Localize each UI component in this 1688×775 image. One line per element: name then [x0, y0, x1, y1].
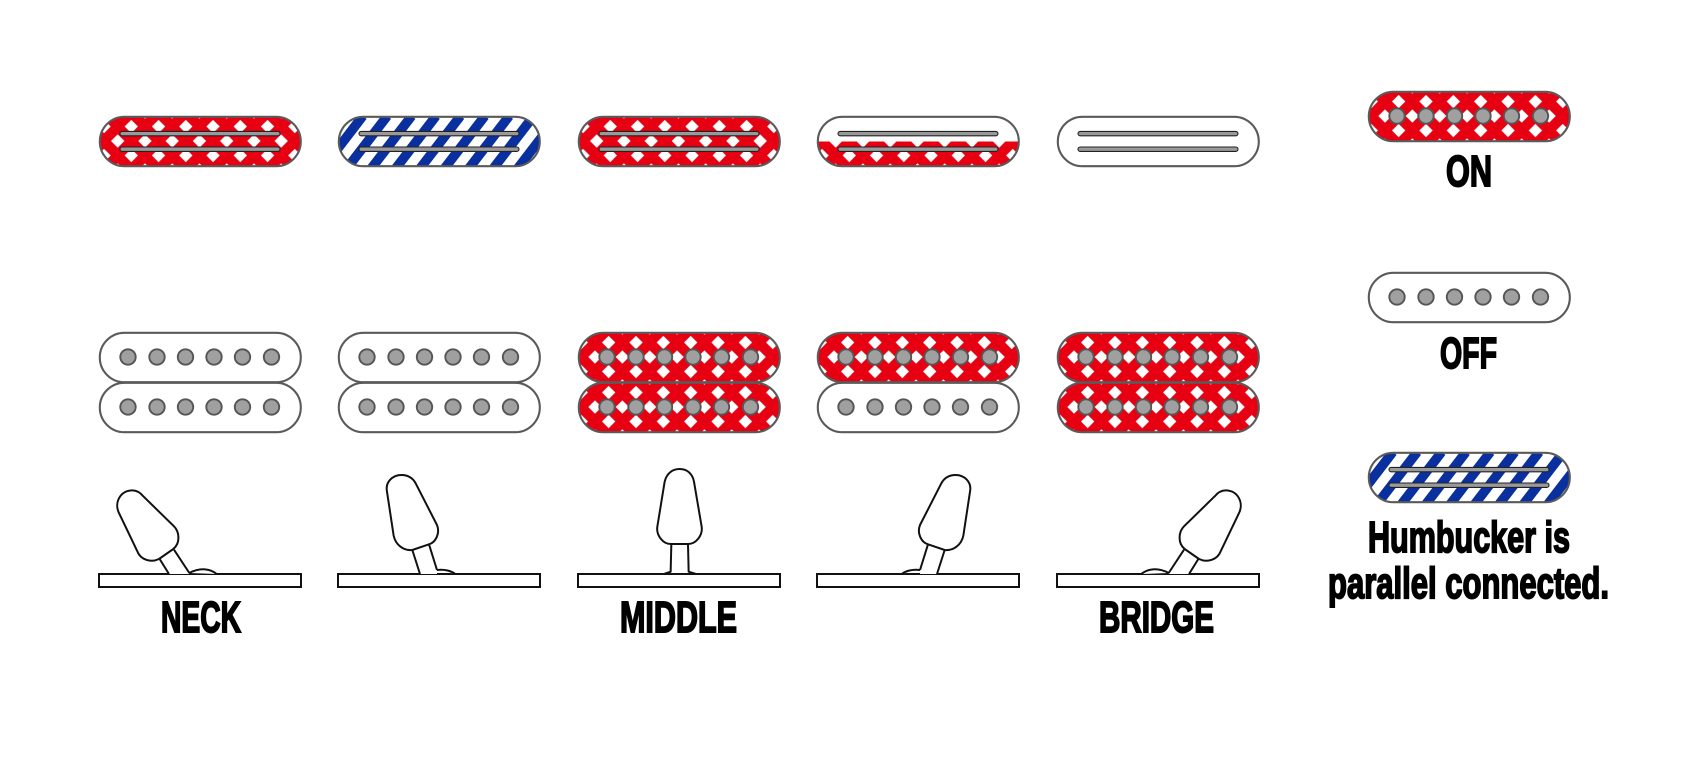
legend label: OFF: OFF — [1440, 329, 1497, 378]
label: MIDDLE: MIDDLE — [620, 593, 737, 642]
legend note: humbucker is parallel connected: Humbucker is — [1368, 513, 1570, 562]
pickup pair: neck position, both off — [100, 333, 301, 432]
humbucker row: neck position, on — [100, 117, 301, 166]
pickup pair: bridge position, both on — [1058, 333, 1259, 432]
toggle switch: bridge — [1057, 490, 1259, 587]
toggle switch: position 4 — [817, 475, 1019, 587]
humbucker row: middle position, on — [579, 117, 780, 166]
legend note: humbucker is parallel connected — [1328, 513, 1609, 608]
humbucker row: position 2, parallel — [298, 116, 558, 168]
humbucker row: position 4, half on — [817, 117, 1019, 168]
humbucker row: bridge position, off — [1058, 117, 1259, 166]
pickup pair: position 4, top on, bottom off — [818, 333, 1019, 432]
toggle switch: neck — [99, 490, 301, 587]
label: NECK: NECK — [161, 593, 241, 642]
legend label: ON: ON — [1446, 147, 1492, 196]
legend: on pickup — [1369, 92, 1570, 141]
legend: off pickup — [1369, 273, 1570, 322]
toggle switch: position 2 — [338, 475, 540, 587]
pickup pair: middle position, both on — [579, 333, 780, 432]
legend: parallel humbucker — [1328, 452, 1588, 504]
toggle switch: middle — [578, 469, 780, 587]
label: BRIDGE: BRIDGE — [1099, 593, 1214, 642]
pickup pair: position 2, both off — [339, 333, 540, 432]
